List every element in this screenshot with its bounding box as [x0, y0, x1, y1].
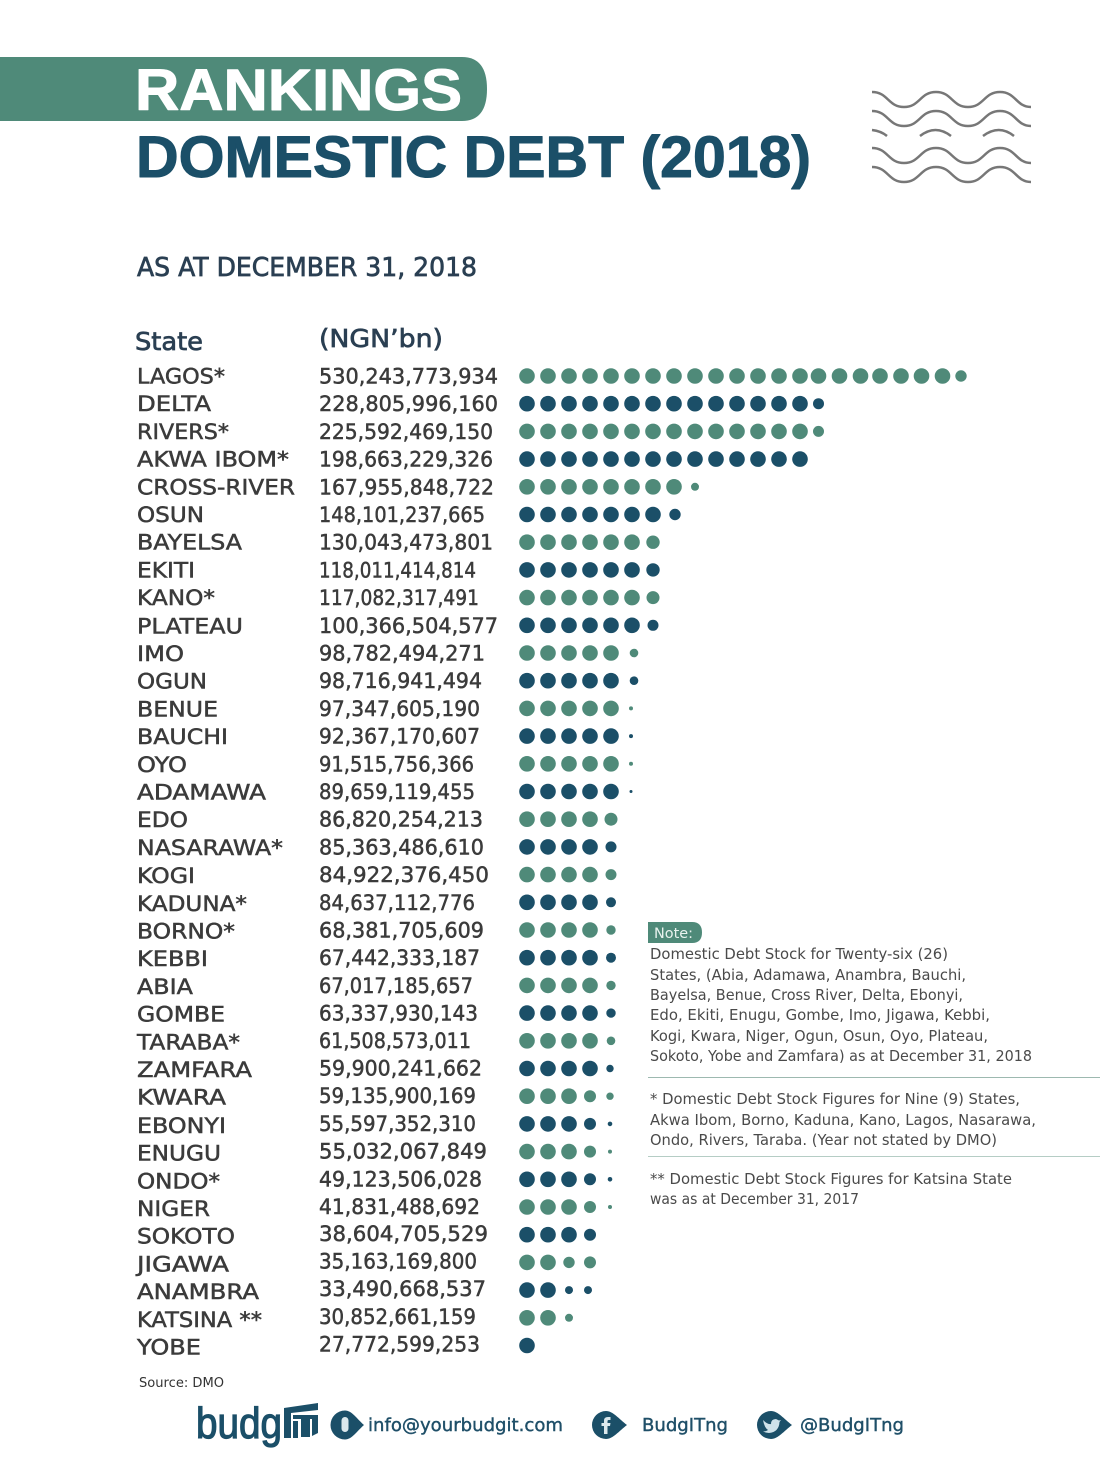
- row: Imo: [137, 642, 638, 667]
- note text: nine states: [650, 1090, 1036, 1149]
- row: Edo: EDO: [137, 808, 188, 833]
- row: Benue: 97,347,605,190: [319, 697, 480, 722]
- row: Lagos: 530,243,773,934: [319, 364, 498, 390]
- row: Kano: KANO*: [137, 586, 215, 611]
- email address: info@yourbudgit.com: [368, 1415, 563, 1436]
- note text: nine states: * Domestic Debt Stock Figures for Nine (9) States,: [650, 1090, 1020, 1108]
- row: Gombe: 63,337,930,143: [319, 1002, 478, 1027]
- row: Akwa Ibom: [137, 448, 808, 473]
- row: Kwara: KWARA: [137, 1086, 226, 1111]
- row: Cross-River: CROSS-RIVER: [137, 475, 295, 500]
- row: Oyo: OYO: [137, 753, 187, 778]
- row: Anambra: 33,490,668,537: [319, 1277, 486, 1302]
- row: Akwa Ibom: AKWA IBOM*: [137, 448, 289, 473]
- title: rankings: RANKINGS: [135, 58, 462, 123]
- row: Ogun: 98,716,941,494: [319, 669, 482, 694]
- row: Jigawa: 35,163,169,800: [319, 1249, 477, 1274]
- row: Kano: 117,082,317,491: [319, 586, 479, 611]
- facebook handle: BudgITng: [642, 1415, 728, 1436]
- row: Kebbi: [137, 946, 616, 972]
- row: Zamfara: 59,900,241,662: [319, 1056, 482, 1082]
- row: Abia: ABIA: [137, 975, 193, 1000]
- note text: twenty-six states: Sokoto, Yobe and Zamfara) as at December 31, 2018: [650, 1047, 1032, 1065]
- title: domestic debt: DOMESTIC DEBT (2018): [136, 125, 811, 190]
- note text: twenty-six states: Bayelsa, Benue, Cross River, Delta, Ebonyi,: [650, 986, 963, 1004]
- row: Kwara: [137, 1084, 614, 1111]
- row: Sokoto: SOKOTO: [137, 1225, 235, 1250]
- row: Delta: DELTA: [137, 392, 211, 417]
- note label: Note:: [654, 926, 693, 942]
- row: Bauchi: 92,367,170,607: [319, 725, 480, 750]
- icon: facebook: [592, 1411, 627, 1439]
- row: Adamawa: ADAMAWA: [137, 780, 266, 806]
- row: Katsina: 30,852,661,159: [319, 1305, 476, 1330]
- row: Nasarawa: [137, 835, 616, 861]
- twitter handle: @BudgITng: [800, 1415, 904, 1436]
- row: Ebonyi: EBONYI: [137, 1114, 226, 1139]
- row: Imo: IMO: [137, 642, 184, 667]
- row: Ekiti: [137, 558, 660, 583]
- row: Cross-River: [137, 475, 699, 500]
- row: Nasarawa: 85,363,486,610: [319, 835, 484, 860]
- row: Kaduna: [137, 891, 616, 917]
- note label: [648, 922, 702, 943]
- row: Niger: NIGER: [137, 1197, 210, 1222]
- row: Bayelsa: [137, 531, 660, 556]
- row: Benue: BENUE: [137, 697, 218, 722]
- row: Niger: [137, 1195, 612, 1222]
- icon: twitter: [757, 1411, 792, 1439]
- row: Jigawa: JIGAWA: [135, 1252, 229, 1277]
- note text: twenty-six states: Edo, Ekiti, Enugu, Gombe, Imo, Jigawa, Kebbi,: [650, 1006, 990, 1024]
- row: Ekiti: EKITI: [137, 558, 195, 583]
- row: Edo: 86,820,254,213: [319, 808, 483, 833]
- row: Borno: [137, 918, 616, 944]
- column heading: NGN bn: (NGN’bn): [319, 324, 443, 353]
- row: Lagos: [137, 364, 967, 390]
- row: Adamawa: 89,659,119,455: [319, 780, 475, 805]
- row: Ondo: ONDO*: [137, 1169, 220, 1194]
- row: Yobe: [136, 1332, 535, 1360]
- row: Kebbi: 67,442,333,187: [319, 946, 480, 971]
- row: Plateau: [137, 614, 658, 639]
- row: Jigawa: [135, 1249, 596, 1277]
- row: Ogun: OGUN: [137, 670, 207, 695]
- row: Osun: [137, 503, 681, 528]
- row: Nasarawa: NASARAWA*: [137, 836, 283, 861]
- row: Kogi: KOGI: [137, 864, 195, 889]
- row: Ondo: 49,123,506,028: [319, 1167, 482, 1192]
- note text: Katsina: [650, 1170, 1012, 1208]
- row: Benue: [137, 697, 633, 722]
- row: Oyo: 91,515,756,366: [319, 752, 474, 777]
- row: Bayelsa: 130,043,473,801: [319, 531, 493, 556]
- row: Gombe: GOMBE: [137, 1003, 225, 1028]
- note text: nine states: Ondo, Rivers, Taraba. (Year not stated by DMO): [650, 1131, 997, 1149]
- row: Rivers: [137, 420, 824, 445]
- row: Katsina: [137, 1305, 573, 1333]
- row: Kebbi: KEBBI: [137, 947, 208, 972]
- row: Bayelsa: BAYELSA: [137, 531, 242, 556]
- row: Edo: [137, 808, 618, 833]
- row: Osun: 148,101,237,665: [319, 503, 485, 528]
- row: Abia: 67,017,185,657: [319, 974, 473, 999]
- icon: decorative waves: [872, 92, 1031, 182]
- row: Kano: [137, 586, 660, 611]
- row: Kwara: 59,135,900,169: [319, 1084, 476, 1109]
- source: Source: DMO: [139, 1376, 224, 1391]
- row: Katsina: KATSINA **: [137, 1308, 262, 1333]
- note text: twenty-six states: Kogi, Kwara, Niger, Ogun, Osun, Oyo, Plateau,: [650, 1027, 988, 1045]
- icon: email: [330, 1410, 364, 1440]
- note text: twenty-six states: Domestic Debt Stock for Twenty-six (26): [650, 945, 948, 963]
- column heading: state: State: [135, 327, 203, 356]
- row: Enugu: ENUGU: [137, 1142, 221, 1167]
- note text: Katsina: was as at December 31, 2017: [650, 1190, 859, 1208]
- row: Zamfara: ZAMFARA: [137, 1058, 252, 1083]
- note text: twenty-six states: [650, 945, 1032, 1065]
- row: Sokoto: 38,604,705,529: [319, 1222, 488, 1247]
- row: Borno: BORNO*: [137, 920, 235, 944]
- row: Plateau: 100,366,504,577: [319, 614, 498, 639]
- row: Taraba: 61,508,573,011: [319, 1029, 471, 1054]
- row: Niger: 41,831,488,692: [319, 1195, 480, 1220]
- row: Rivers: 225,592,469,150: [319, 420, 493, 445]
- note text: nine states: Akwa Ibom, Borno, Kaduna, Kano, Lagos, Nasarawa,: [650, 1111, 1036, 1129]
- row: Kaduna: KADUNA*: [137, 892, 247, 917]
- row: Delta: 228,805,996,160: [319, 392, 498, 417]
- row: Enugu: 55,032,067,849: [319, 1140, 487, 1165]
- row: Adamawa: [137, 780, 632, 806]
- row: Ogun: [137, 669, 638, 695]
- row: Bauchi: BAUCHI: [137, 725, 228, 750]
- row: Anambra: ANAMBRA: [137, 1280, 259, 1305]
- row: Lagos: LAGOS*: [137, 364, 225, 390]
- logo: budgIT: budg: [196, 1399, 282, 1448]
- row: Zamfara: [137, 1056, 614, 1083]
- row: Akwa Ibom: 198,663,229,326: [319, 448, 493, 473]
- row: Ekiti: 118,011,414,814: [319, 558, 476, 583]
- row: Kogi: [137, 863, 616, 889]
- row: Anambra: [137, 1277, 592, 1305]
- note text: twenty-six states: States, (Abia, Adamawa, Anambra, Bauchi,: [650, 966, 966, 984]
- row: Yobe: 27,772,599,253: [319, 1332, 480, 1358]
- row: Bauchi: [137, 725, 633, 750]
- row: Yobe: YOBE: [136, 1336, 201, 1360]
- row: Sokoto: [137, 1222, 596, 1250]
- row: Gombe: [137, 1002, 616, 1028]
- row: Ebonyi: [137, 1112, 612, 1139]
- row: Rivers: RIVERS*: [137, 420, 229, 445]
- row: Kaduna: 84,637,112,776: [319, 891, 475, 916]
- row: Abia: [137, 974, 616, 1000]
- row: Enugu: [137, 1140, 612, 1167]
- row: Oyo: [137, 752, 633, 778]
- row: Ondo: [137, 1167, 612, 1194]
- row: Delta: [137, 392, 824, 417]
- row: Borno: 68,381,705,609: [319, 918, 484, 944]
- row: Osun: OSUN: [137, 503, 204, 528]
- row: Taraba: [136, 1029, 615, 1055]
- note text: Katsina: ** Domestic Debt Stock Figures for Katsina State: [650, 1170, 1012, 1188]
- row: Cross-River: 167,955,848,722: [319, 475, 494, 500]
- row: Plateau: PLATEAU: [137, 614, 243, 639]
- row: Imo: 98,782,494,271: [319, 642, 485, 666]
- subtitle: date: AS AT DECEMBER 31, 2018: [137, 253, 477, 283]
- row: Kogi: 84,922,376,450: [319, 863, 489, 888]
- header banner: [0, 57, 487, 121]
- row: Taraba: TARABA*: [136, 1030, 240, 1055]
- row: Ebonyi: 55,597,352,310: [319, 1112, 476, 1137]
